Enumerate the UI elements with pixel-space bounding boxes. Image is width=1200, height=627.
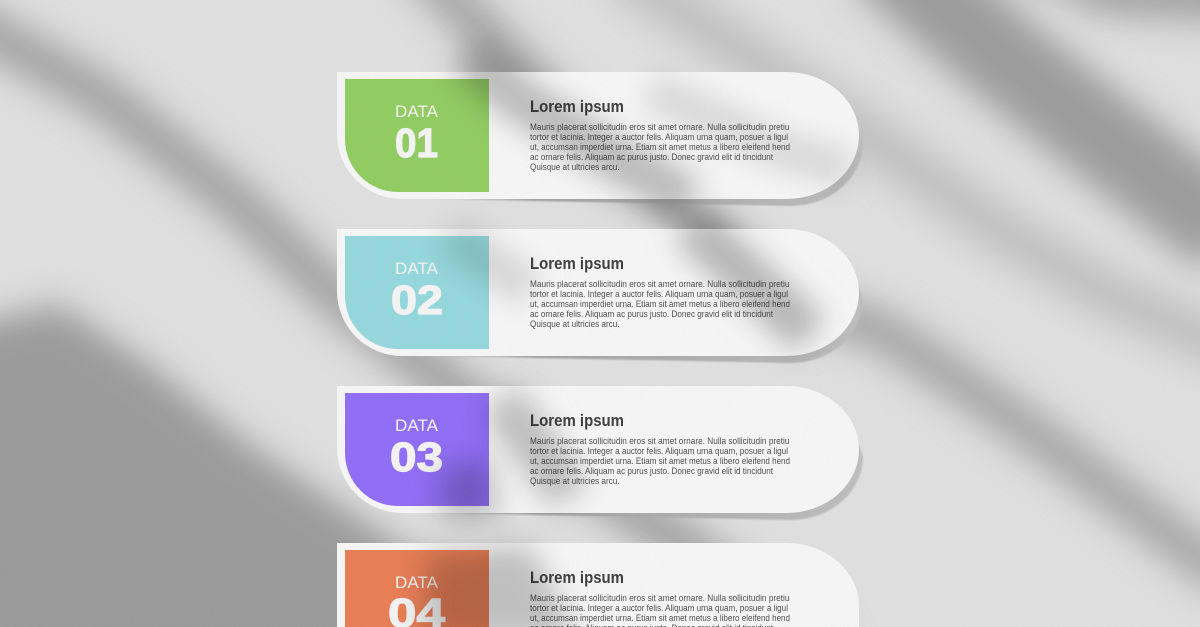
text block 3: tortor et lacinia. Integer a auctor felis. Aliquam urna quam, posuer a ligul bbox=[530, 446, 788, 457]
colour panel 2 bbox=[345, 236, 489, 349]
card 2 drop shadow bbox=[430, 279, 863, 363]
text block 2 bbox=[530, 279, 790, 330]
text block 2: Mauris placerat sollicitudin eros sit amet ornare. Nulla sollicitudin pretiu bbox=[530, 279, 790, 290]
text block 1 bbox=[530, 122, 790, 173]
number 1: 01 bbox=[395, 120, 438, 166]
text block 3: Quisque at ultricies arcu. bbox=[530, 476, 620, 487]
card 1 bbox=[337, 72, 863, 206]
text block 1: Quisque at ultricies arcu. bbox=[530, 162, 620, 173]
number 2: 02 bbox=[391, 277, 443, 323]
colour panel 1 bbox=[345, 79, 489, 192]
heading 4: Lorem ipsum bbox=[530, 568, 624, 587]
card 1 body bbox=[337, 72, 859, 199]
text block 1: tortor et lacinia. Integer a auctor felis. Aliquam urna quam, posuer a ligul bbox=[530, 132, 788, 143]
heading 2: Lorem ipsum bbox=[530, 254, 624, 273]
shadow falling across the cards bbox=[425, 55, 850, 627]
text block 2: tortor et lacinia. Integer a auctor felis. Aliquam urna quam, posuer a ligul bbox=[530, 289, 788, 300]
text block 4: Mauris placerat sollicitudin eros sit amet ornare. Nulla sollicitudin pretiu bbox=[530, 593, 790, 604]
text block 4 bbox=[530, 593, 790, 627]
card 4 body bbox=[337, 543, 859, 627]
text block 3 bbox=[530, 436, 790, 487]
card 2 body bbox=[337, 229, 859, 356]
text block 2: Quisque at ultricies arcu. bbox=[530, 319, 620, 330]
colour panel 3 bbox=[345, 393, 489, 506]
text block 3: ac ornare felis. Aliquam ac purus justo. Donec gravid elit id tincidunt bbox=[530, 466, 773, 477]
number 3: 03 bbox=[390, 434, 443, 480]
card 2 bbox=[337, 229, 863, 363]
text block 1: ut, accumsan imperdiet urna. Etiam sit amet metus a libero eleifend hend bbox=[530, 142, 790, 153]
text block 1: ac ornare felis. Aliquam ac purus justo. Donec gravid elit id tincidunt bbox=[530, 152, 773, 163]
text block 4: ut, accumsan imperdiet urna. Etiam sit amet metus a libero eleifend hend bbox=[530, 613, 790, 624]
text block 3: Mauris placerat sollicitudin eros sit amet ornare. Nulla sollicitudin pretiu bbox=[530, 436, 790, 447]
heading 1: Lorem ipsum bbox=[530, 97, 624, 116]
text block 4: tortor et lacinia. Integer a auctor felis. Aliquam urna quam, posuer a ligul bbox=[530, 603, 788, 614]
label 3: DATA bbox=[395, 416, 439, 435]
card 3 drop shadow bbox=[430, 436, 863, 520]
card 3 bbox=[337, 386, 863, 520]
card 3 body bbox=[337, 386, 859, 513]
text block 2: ut, accumsan imperdiet urna. Etiam sit amet metus a libero eleifend hend bbox=[530, 299, 790, 310]
label 1: DATA bbox=[395, 102, 439, 121]
card 4 bbox=[337, 543, 859, 627]
label 4: DATA bbox=[395, 573, 439, 592]
colour panel 4 bbox=[345, 550, 489, 627]
text block 2: ac ornare felis. Aliquam ac purus justo. Donec gravid elit id tincidunt bbox=[530, 309, 773, 320]
label 2: DATA bbox=[395, 259, 439, 278]
card 1 drop shadow bbox=[430, 122, 863, 206]
text block 1: Mauris placerat sollicitudin eros sit amet ornare. Nulla sollicitudin pretiu bbox=[530, 122, 790, 133]
heading 3: Lorem ipsum bbox=[530, 411, 624, 430]
text block 3: ut, accumsan imperdiet urna. Etiam sit amet metus a libero eleifend hend bbox=[530, 456, 790, 467]
